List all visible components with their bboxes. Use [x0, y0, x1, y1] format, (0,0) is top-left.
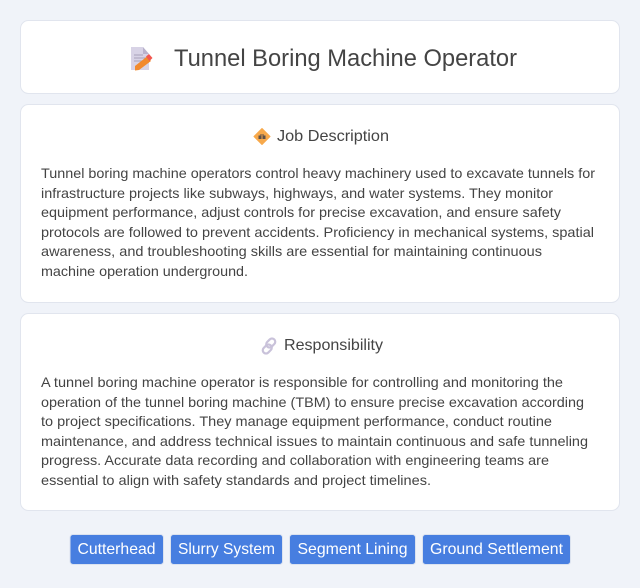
text block: responsibility: operation of the tunnel boring machine (TBM) to ensure precise excavation according — [41, 394, 584, 410]
panel: job description — [20, 104, 620, 302]
text block: responsibility: progress. Accurate data recording and collaboration with engineering teams are — [41, 452, 549, 468]
text block: job description: protocols are followed to prevent accidents. Proficiency in mechanical systems, spatial — [41, 224, 594, 240]
text block: job description: Tunnel boring machine operators control heavy machinery used to excavate tunnels for — [41, 165, 595, 181]
icon: chain link — [261, 337, 277, 355]
tag: segment lining — [290, 534, 416, 564]
text block: responsibility — [41, 374, 588, 488]
text block: job description: machine operation underground. — [41, 263, 248, 279]
icon: document with pencil — [131, 47, 152, 70]
tags row — [70, 534, 570, 564]
tag: ground settlement — [422, 534, 570, 564]
text block: responsibility: A tunnel boring machine operator is responsible for controlling and monitoring the — [41, 374, 563, 390]
heading: job description: Job Description — [277, 128, 389, 145]
heading: responsibility: Responsibility — [284, 337, 383, 354]
text block: job description: awareness, and troubleshooting skills are essential for maintaining continuous — [41, 243, 542, 259]
panel: responsibility — [20, 314, 620, 510]
text block: job description: equipment performance, adjust controls for precise excavation, and ensure safety — [41, 204, 561, 220]
icon: diamond road sign — [254, 128, 270, 144]
tag: slurry system — [170, 534, 282, 564]
text block: responsibility: to project specifications. They manage equipment performance, conduct routine — [41, 413, 552, 429]
header panel — [20, 20, 620, 94]
tag: cutterhead — [70, 534, 164, 564]
text block: job description: infrastructure projects like subways, highways, and water systems. They monitor — [41, 185, 553, 201]
text block: responsibility: essential to align with safety standards and project timelines. — [41, 472, 431, 488]
tag: slurry system: Slurry System — [178, 541, 275, 558]
title: Tunnel Boring Machine Operator — [174, 45, 517, 72]
text block: job description — [41, 165, 595, 279]
text block: responsibility: maintenance, and address technical issues to maintain continuous and safe tunneling — [41, 433, 588, 449]
tag: ground settlement: Ground Settlement — [430, 541, 564, 558]
tag: cutterhead: Cutterhead — [78, 541, 156, 558]
tag: segment lining: Segment Lining — [298, 541, 408, 558]
